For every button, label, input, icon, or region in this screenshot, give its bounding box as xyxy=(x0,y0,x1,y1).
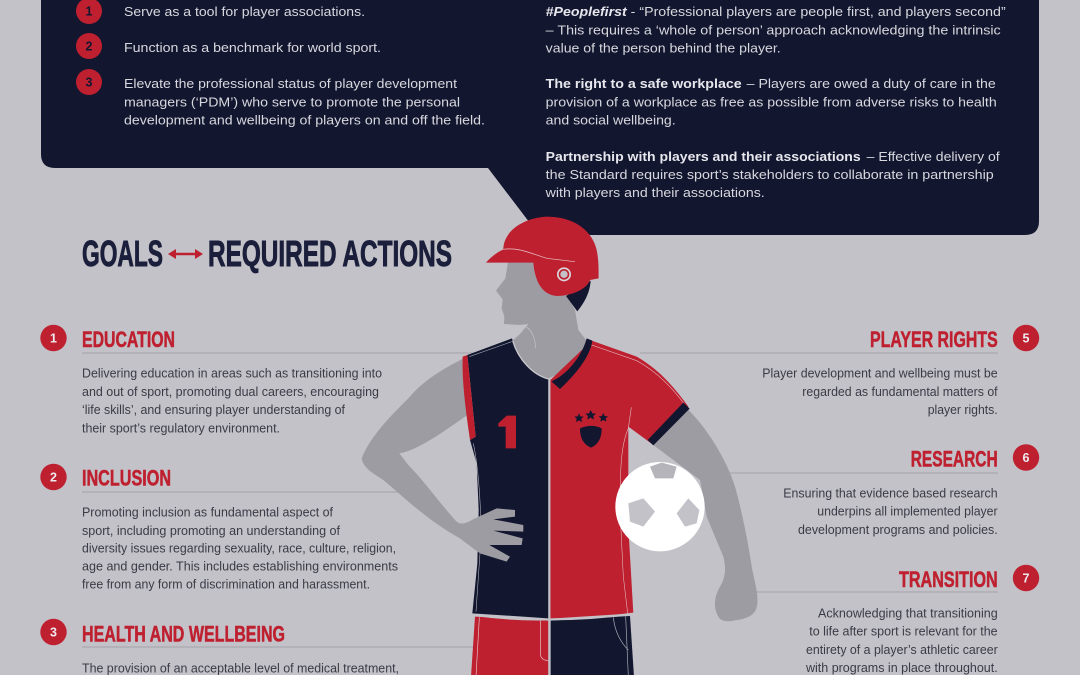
principle: partnership: the Standard requires sport’s stakeholders to collaborate in partnership xyxy=(546,168,994,182)
goal 7: transition: to life after sport is relevant for the xyxy=(809,624,998,638)
purpose list xyxy=(76,0,485,128)
purpose item 1 xyxy=(76,0,365,24)
goal 2: inclusion: age and gender. This includes establishing environments xyxy=(82,560,398,574)
goal 6: research: development programs and policies. xyxy=(798,523,998,537)
goal 7: transition: TRANSITION xyxy=(899,567,998,592)
goal 2: inclusion: 2 xyxy=(50,470,57,484)
goal 1: education: 1 xyxy=(50,332,57,346)
crest with stars xyxy=(574,410,608,448)
goal 1: education: ‘life skills’, and ensuring player understanding of xyxy=(82,403,345,417)
goal 3: health and wellbeing: 3 xyxy=(50,626,57,640)
soccer ball xyxy=(615,462,705,551)
principle: safe workplace: provision of a workplace as free as possible from adverse risks to health xyxy=(546,95,997,109)
goal 5: player rights: Player development and wellbeing must be xyxy=(762,366,998,380)
hair xyxy=(566,281,591,311)
goal 2: inclusion: diversity issues regarding sexuality, race, culture, religion, xyxy=(82,542,396,556)
player right arm xyxy=(653,407,758,621)
heading: goals and required actions: GOALS xyxy=(82,233,163,274)
principle: safe workplace: and social wellbeing. xyxy=(546,114,676,128)
illustration: player figure xyxy=(362,217,758,675)
goal 6: research: RESEARCH xyxy=(911,447,998,472)
waist trim xyxy=(472,378,635,675)
purpose item 3: Elevate the professional status of player development xyxy=(124,77,458,91)
principle: people first: – This requires a ‘whole of person’ approach acknowledging the intrinsic xyxy=(546,23,1001,37)
goal 1: education: their sport’s regulatory environment. xyxy=(82,421,280,435)
goal 2: inclusion: INCLUSION xyxy=(82,466,171,491)
neck crease xyxy=(521,325,536,348)
principle: people first: #Peoplefirst xyxy=(546,5,628,19)
principle: partnership: – Effective delivery of xyxy=(867,150,1000,164)
shorts xyxy=(471,616,634,675)
goal 7: transition: 7 xyxy=(1023,572,1030,586)
jersey red half xyxy=(550,338,690,619)
goal 6: research xyxy=(783,444,1039,537)
player head and neck xyxy=(496,260,586,378)
goal 7: transition xyxy=(805,565,1039,675)
purpose item 1: Serve as a tool for player associations. xyxy=(124,5,365,19)
principle: safe workplace xyxy=(546,77,997,128)
sleeve band xyxy=(648,403,690,445)
goal 5: player rights: PLAYER RIGHTS xyxy=(870,327,998,352)
goal 5: player rights xyxy=(762,325,1039,417)
purpose item 3: managers (‘PDM’) who serve to promote the personal xyxy=(124,95,460,109)
goal 6: research: Ensuring that evidence based research xyxy=(783,486,998,500)
principle: partnership: with players and their associations. xyxy=(545,186,765,200)
purpose item 2 xyxy=(76,33,381,59)
principle: partnership: Partnership with players and their associations xyxy=(546,150,861,164)
goal 2: inclusion: sport, including promoting an understanding of xyxy=(82,524,340,538)
helmet xyxy=(486,217,599,296)
panel: purpose and principles speech panel xyxy=(41,0,1039,235)
goal 5: player rights: 5 xyxy=(1023,332,1030,346)
principle: people first: value of the person behind the player. xyxy=(546,42,781,56)
purpose item 2: 2 xyxy=(86,40,93,54)
goal 7: transition: with programs in place throughout. xyxy=(805,661,998,675)
goal 3: health and wellbeing xyxy=(40,619,399,675)
goal 2: inclusion xyxy=(40,464,398,592)
jersey number xyxy=(498,416,516,448)
goal 5: player rights: player rights. xyxy=(928,403,998,417)
goal 1: education: and out of sport, promoting dual careers, encouraging xyxy=(82,385,379,399)
purpose item 1: 1 xyxy=(86,4,93,18)
goal 2: inclusion: free from any form of discrimination and harassment. xyxy=(82,578,370,592)
goal 5: player rights: regarded as fundamental matters of xyxy=(802,385,998,399)
principle: partnership xyxy=(545,150,1000,200)
goal 1: education: Delivering education in areas such as transitioning into xyxy=(82,366,382,380)
goal 3: health and wellbeing: HEALTH AND WELLBEING xyxy=(82,622,285,647)
heading: goals and required actions: REQUIRED ACTIONS xyxy=(208,233,452,274)
principle: safe workplace: – Players are owed a duty of care in the xyxy=(747,77,996,91)
principles text xyxy=(545,5,1006,200)
goal 6: research: 6 xyxy=(1023,451,1030,465)
goal 2: inclusion: Promoting inclusion as fundamental aspect of xyxy=(82,506,333,520)
goal 7: transition: Acknowledging that transitioning xyxy=(818,606,998,620)
principle: safe workplace: The right to a safe workplace xyxy=(546,77,742,91)
collar trim xyxy=(551,338,592,389)
purpose item 3: 3 xyxy=(86,76,93,90)
jersey navy half xyxy=(463,338,548,618)
goal 7: transition: entirety of a player’s athletic career xyxy=(806,643,998,657)
goal 1: education xyxy=(40,325,382,435)
player left arm xyxy=(362,357,483,553)
purpose item 2: Function as a benchmark for world sport. xyxy=(124,41,381,55)
purpose item 3 xyxy=(76,69,485,128)
principle: people first: - “Professional players are people first, and players second” xyxy=(631,5,1006,19)
principle: people first xyxy=(546,5,1006,56)
goal 1: education: EDUCATION xyxy=(82,327,175,352)
hand on hip xyxy=(460,508,523,562)
goal 6: research: underpins all implemented player xyxy=(817,504,998,518)
heading: goals and required actions xyxy=(82,233,452,274)
purpose item 3: development and wellbeing of players on and off the field. xyxy=(124,114,485,128)
